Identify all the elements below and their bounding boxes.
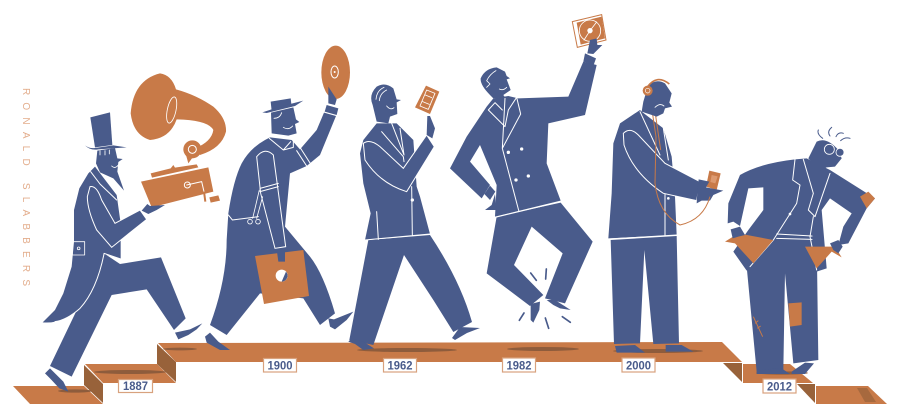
phonograph hub [183, 140, 201, 163]
stitches [753, 317, 763, 337]
raised cuff [325, 105, 338, 115]
head [271, 107, 299, 136]
rear shoe [452, 327, 480, 340]
trousers [50, 253, 186, 377]
raised hand [328, 87, 337, 105]
knee patch [788, 302, 802, 327]
trousers [611, 236, 679, 344]
year label 1900: 1900 [268, 360, 292, 372]
right pocket lining [805, 247, 842, 268]
hand and cuffs [697, 179, 723, 203]
hair [818, 127, 850, 141]
headphones [643, 80, 669, 96]
left shoe [757, 368, 790, 374]
collar and bow tie [269, 138, 293, 150]
frown [655, 105, 664, 107]
pocket [72, 242, 85, 255]
rear shoe [205, 333, 230, 350]
step: second tread [85, 364, 176, 383]
vest hem and stripes [228, 148, 311, 220]
hand [142, 204, 165, 214]
record disc [321, 46, 350, 99]
jacket button [789, 213, 791, 215]
shadow: figure 1900 foot [163, 348, 197, 350]
figure 1982: jumping man with CD [450, 15, 606, 328]
trousers [487, 203, 593, 306]
raised hand [587, 38, 602, 54]
year label 2012: 2012 [767, 382, 792, 394]
year label 2000 [622, 358, 655, 372]
main walkway [158, 342, 742, 362]
top hat [85, 112, 127, 150]
shadow: step 1887 [94, 370, 166, 374]
year label 2000: 2000 [626, 360, 651, 372]
left pocket lining [725, 233, 773, 263]
record sleeve [255, 250, 309, 304]
boater hat [262, 98, 303, 113]
jacket button [667, 197, 670, 200]
right hand [830, 240, 843, 253]
jacket lines [750, 159, 830, 270]
year label 1900 [264, 358, 296, 372]
jacket hem and centre lines [365, 123, 430, 240]
MP3 player [706, 171, 721, 190]
shadow: figure 1982 [507, 347, 579, 351]
front shoe [175, 323, 202, 339]
jacket [360, 123, 430, 240]
phonograph box [141, 167, 213, 207]
shadow: figure 1887 rear foot [58, 389, 92, 393]
shoe [348, 338, 374, 350]
step: descending riser [723, 363, 742, 382]
smile and hair [100, 150, 118, 167]
right shoe [792, 363, 814, 374]
sleeve [87, 186, 147, 247]
arm [623, 130, 700, 201]
phonograph crank [184, 182, 220, 203]
foot pointing down [531, 302, 540, 323]
jacket [608, 110, 677, 238]
face lines [274, 113, 293, 129]
player cord [650, 97, 710, 225]
jacket button [411, 198, 414, 202]
head and beard [96, 148, 124, 191]
trousers [747, 237, 818, 372]
head [808, 140, 842, 171]
jacket and arms [728, 158, 875, 272]
other foot [547, 300, 571, 310]
year label 1982: 1982 [506, 360, 532, 372]
trousers and body [210, 113, 336, 335]
trousers [349, 235, 472, 345]
step: first riser [84, 365, 103, 403]
raised cuff [583, 53, 596, 65]
figure 1962: man in suit with cassette tape [348, 85, 480, 350]
head [481, 67, 511, 98]
head [642, 81, 672, 117]
left shoe [615, 345, 645, 353]
shadow: figure 2012 [756, 371, 808, 375]
figure 2012: ragged man with empty pockets [725, 127, 875, 374]
year label 2012 [763, 379, 796, 394]
rear shoe [45, 368, 68, 392]
jacket lines [609, 112, 677, 239]
right shoe [666, 345, 693, 352]
left hand [731, 227, 745, 238]
horn rim line [165, 96, 179, 124]
publisher stamp [857, 388, 876, 402]
jacket and raised arm [450, 62, 597, 217]
figure 1900: man in boater with vinyl record [205, 46, 353, 350]
arm outline [257, 151, 286, 248]
coat tail line [55, 253, 121, 322]
watch keys [248, 190, 263, 224]
step: second riser [157, 344, 176, 382]
hair and smile [376, 87, 394, 109]
jacket buttons [507, 147, 530, 182]
sleeve band [260, 183, 278, 192]
front shoe [328, 312, 353, 329]
cassette tape [415, 86, 439, 114]
lapel line [91, 172, 117, 200]
signature text: RONALD SLABBERS [20, 88, 31, 286]
glasses [824, 144, 844, 156]
hip cuff and hand [484, 186, 497, 210]
year label 1982 [502, 358, 536, 372]
figure 1887: man in top hat with phonograph [43, 73, 226, 392]
year label 1887: 1887 [123, 381, 148, 393]
CD case [572, 15, 606, 47]
motion lines [519, 269, 570, 328]
hand [427, 116, 435, 138]
year label 1887 [118, 380, 152, 393]
figure 2000: man with headphones and MP3 player [608, 80, 723, 353]
hair and smile [487, 71, 507, 90]
shadow: figure 1962 [357, 348, 457, 352]
shoulder patch [860, 192, 875, 208]
hand holding sleeve [277, 249, 285, 262]
jacket lines [488, 97, 561, 217]
timeline staircase platform [13, 342, 887, 404]
step: lower tread [743, 364, 813, 383]
step: last tread [816, 386, 887, 404]
head [371, 85, 401, 123]
phonograph lid [151, 164, 198, 178]
tailcoat [43, 167, 121, 322]
step: lower riser [797, 384, 815, 403]
phonograph horn [131, 73, 226, 155]
year label 1962: 1962 [388, 360, 412, 372]
year label 1962 [384, 358, 416, 372]
step: first tread [13, 386, 103, 404]
shadow: figure 2000 [613, 349, 703, 353]
arm [363, 135, 434, 192]
